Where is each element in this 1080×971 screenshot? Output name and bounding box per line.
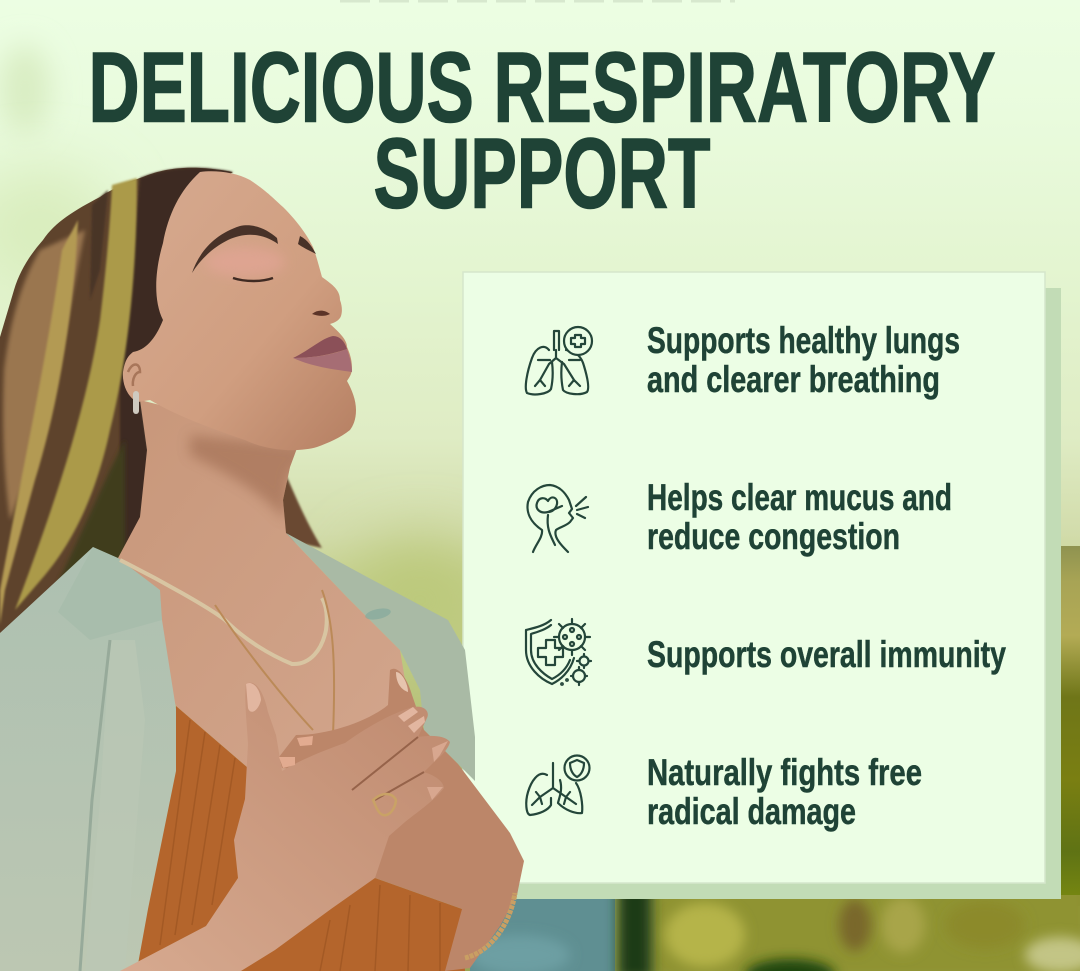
icon: lungs with plus (526, 327, 592, 394)
benefit 1: lungs (526, 320, 960, 400)
necklaces (120, 560, 334, 735)
ear shading (128, 364, 140, 386)
nostril (312, 311, 330, 316)
neck shadow (186, 432, 296, 518)
back hand (279, 669, 524, 971)
benefit 4: free radicals: radical damage (647, 791, 856, 832)
panel: benefits (463, 272, 1061, 899)
closed eye (233, 278, 273, 281)
panel card (463, 272, 1045, 883)
orange top (120, 706, 465, 971)
title (88, 31, 996, 228)
hair (0, 168, 322, 633)
neck and chest (118, 400, 420, 790)
icon: shield with virus (526, 619, 591, 685)
photo: woman breathing with hands on chest (0, 168, 524, 971)
ring (373, 794, 396, 815)
fingers and nails (246, 672, 448, 800)
eye shadow (205, 247, 285, 277)
benefit 4: free radicals (526, 752, 922, 832)
bracelet (465, 893, 515, 958)
benefit 2: mucus (528, 477, 952, 557)
benefit 3: immunity (526, 619, 1006, 685)
shirt (0, 533, 475, 971)
eyebrow (192, 225, 316, 273)
text: Supports healthy lungs (647, 320, 960, 361)
face (123, 171, 356, 450)
text: Helps clear mucus and (647, 477, 952, 518)
icon: head with heart (528, 485, 588, 552)
lips (293, 336, 352, 372)
title: SUPPORT (374, 118, 710, 228)
benefit 1: lungs: and clearer breathing (647, 359, 940, 400)
benefit 2: mucus: reduce congestion (647, 516, 900, 557)
panel shadow (479, 288, 1061, 899)
icon: lungs with shield (526, 756, 590, 815)
heading: eyebrow line cropped at top (340, 0, 735, 2)
text: Naturally fights free (647, 752, 922, 793)
earring (133, 391, 139, 414)
front hand (120, 683, 450, 971)
